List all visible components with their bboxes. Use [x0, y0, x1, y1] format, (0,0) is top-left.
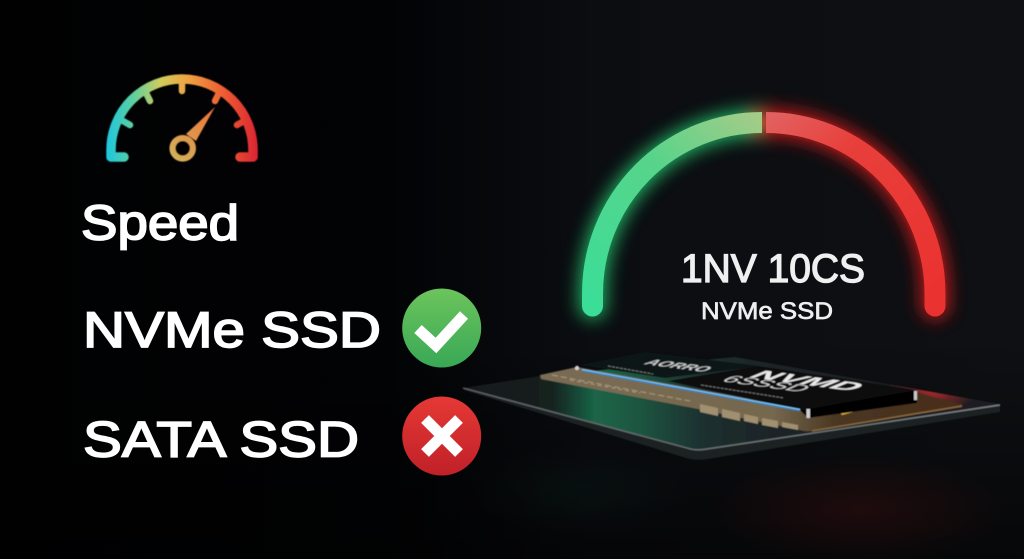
- gauge sublabel: NVMe SSD: [701, 298, 833, 325]
- board traces: [552, 375, 690, 401]
- chip right label: NVMD: [742, 368, 873, 393]
- icon: red cross: [402, 396, 481, 476]
- chip right front face: [800, 390, 917, 418]
- plate: [465, 356, 1000, 450]
- heading: Speed: Speed: [81, 196, 239, 250]
- chip right sublabel: 6SSSD: [716, 374, 817, 394]
- gold contacts: [838, 400, 903, 415]
- board lit edge: [812, 406, 962, 431]
- plate side band: [463, 388, 1000, 460]
- screws: [575, 366, 579, 370]
- gauge glow: [592, 122, 935, 306]
- blue strip: [582, 370, 800, 410]
- illustration: M.2 SSD on plate: [460, 350, 1005, 465]
- gauge value text: 1NV 10CS: [681, 247, 865, 291]
- plate front edge: [463, 388, 1000, 450]
- label: NVMe SSD: NVMe SSD: [83, 302, 381, 358]
- gauge green arc: [582, 122, 762, 316]
- chip left: [580, 352, 760, 378]
- icon: green check: [402, 288, 481, 368]
- label: SATA SSD: SATA SSD: [83, 412, 359, 468]
- chip fine print: [608, 366, 784, 398]
- chip right: [668, 366, 917, 410]
- icon: rainbow speedometer: [111, 79, 253, 159]
- chart: glowing half gauge: [582, 122, 946, 316]
- board teeth: [700, 404, 798, 430]
- chip left label: AORRO: [640, 358, 717, 374]
- gauge red arc: [766, 122, 946, 316]
- circuit board: [540, 367, 962, 431]
- floor glow: [470, 445, 1010, 559]
